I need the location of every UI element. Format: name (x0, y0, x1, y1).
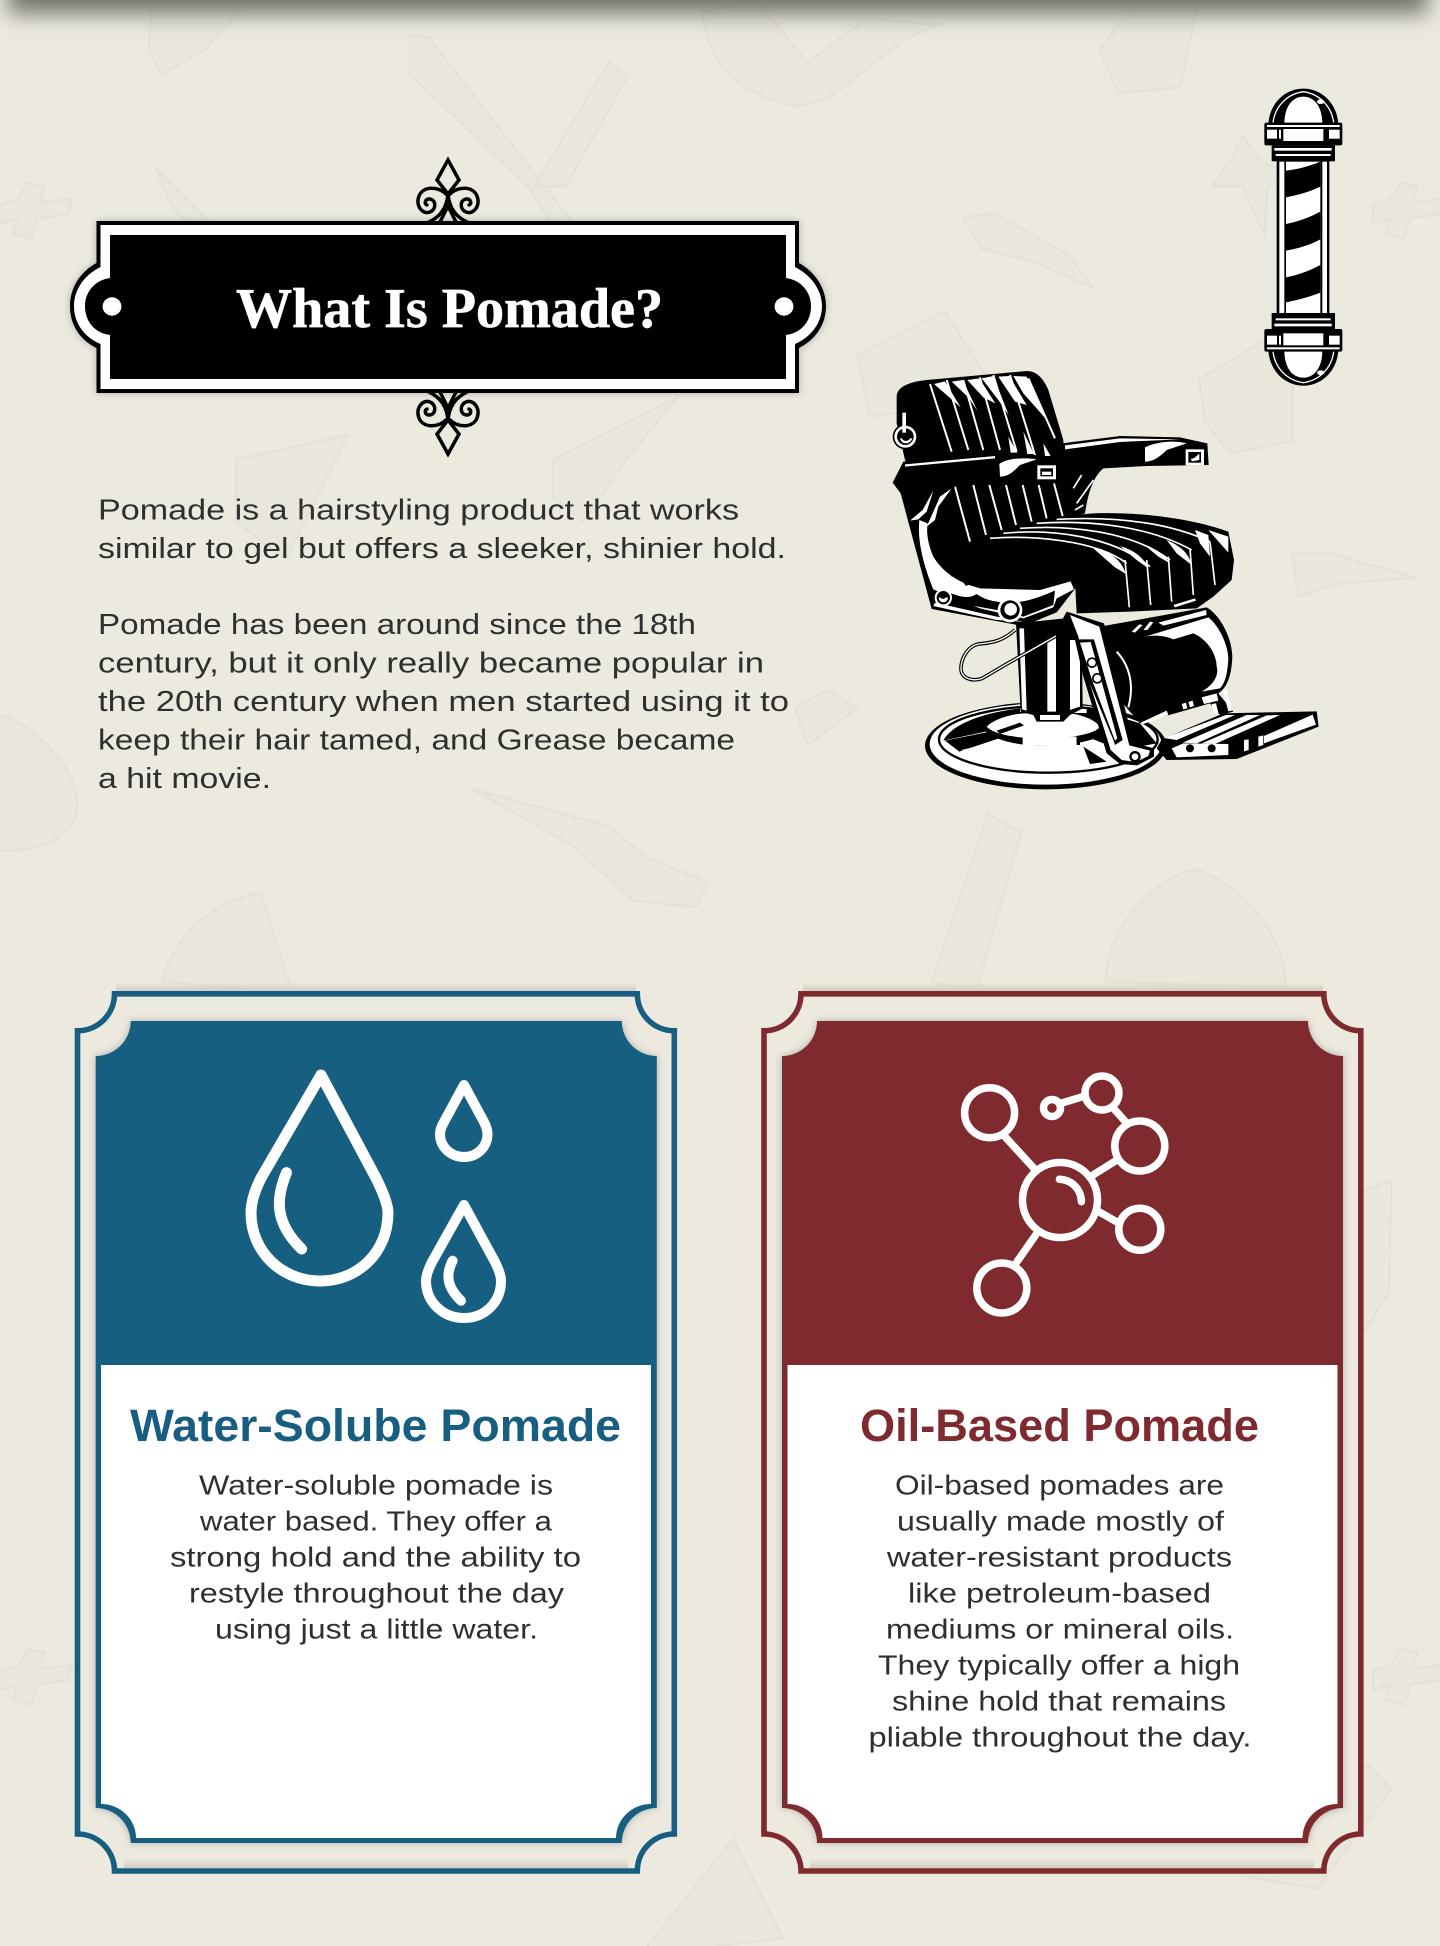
card description (868, 1470, 1252, 1752)
icon: water drops (251, 1075, 501, 1318)
card description (170, 1470, 581, 1644)
card description: water based. They offer a (199, 1506, 552, 1536)
intro text block (98, 494, 789, 795)
card title: Water-Solube Pomade (130, 1400, 621, 1451)
card description: mediums or mineral oils. (886, 1614, 1234, 1644)
chair frame (893, 454, 1075, 626)
intro text block: similar to gel but offers a sleeker, shinier hold. (98, 533, 786, 565)
card description: usually made mostly of (897, 1506, 1224, 1536)
panel: water-soluble pomade (78, 982, 674, 1871)
panel: oil-based pomade (764, 982, 1361, 1871)
card title: Oil-Based Pomade (860, 1400, 1259, 1451)
card description: using just a little water. (215, 1614, 538, 1644)
card description: like petroleum-based (908, 1578, 1211, 1608)
card header colour block (782, 1021, 1343, 1843)
card text area (788, 1365, 1338, 1838)
card bottom shadow (124, 1858, 628, 1868)
card description: shine hold that remains (892, 1686, 1226, 1716)
card description: water-resistant products (886, 1542, 1232, 1572)
card description: strong hold and the ability to (170, 1542, 581, 1572)
chair lower half (925, 607, 1319, 789)
chair upper half (893, 371, 1234, 626)
card description: Oil-based pomades are (895, 1470, 1224, 1500)
intro text block: century, but it only really became popular in (98, 648, 764, 680)
card text area (101, 1365, 651, 1838)
card outer frame (764, 994, 1361, 1871)
chair lower cushion (1100, 607, 1233, 724)
card description: restyle throughout the day (189, 1578, 564, 1608)
icon: barber pole (1264, 89, 1342, 386)
card bottom shadow (810, 1858, 1314, 1868)
icon: barber chair (893, 371, 1319, 789)
card header colour block (96, 1021, 657, 1843)
intro text block: the 20th century when men started using it to (98, 686, 789, 718)
card description: They typically offer a high (878, 1650, 1240, 1680)
chair bracket (1057, 612, 1154, 765)
intro text block: Pomade is a hairstyling product that works (98, 494, 739, 526)
ornament above banner (418, 160, 478, 222)
chair rear arm (1062, 436, 1209, 520)
card outer frame (78, 994, 674, 1871)
card description: Water-soluble pomade is (199, 1470, 553, 1500)
chair lever (961, 630, 1056, 680)
banner plate (70, 221, 826, 393)
chair column (1016, 617, 1083, 722)
card top outer shadow (116, 982, 636, 991)
chair backrest (893, 371, 1093, 593)
chair base (925, 702, 1166, 789)
top edge shadow (8, 0, 1428, 14)
banner: What Is Pomade? (70, 160, 826, 454)
card description: pliable throughout the day. (868, 1722, 1252, 1752)
icon: molecule (965, 1076, 1165, 1313)
chair footrest (1157, 711, 1319, 760)
chair seat (980, 513, 1234, 613)
card top outer shadow (803, 982, 1323, 991)
banner title: What Is Pomade? (236, 278, 663, 340)
ornament below banner (418, 392, 478, 454)
intro text block: keep their hair tamed, and Grease became (98, 724, 735, 756)
intro text block: a hit movie. (98, 763, 271, 795)
intro text block: Pomade has been around since the 18th (98, 609, 696, 641)
